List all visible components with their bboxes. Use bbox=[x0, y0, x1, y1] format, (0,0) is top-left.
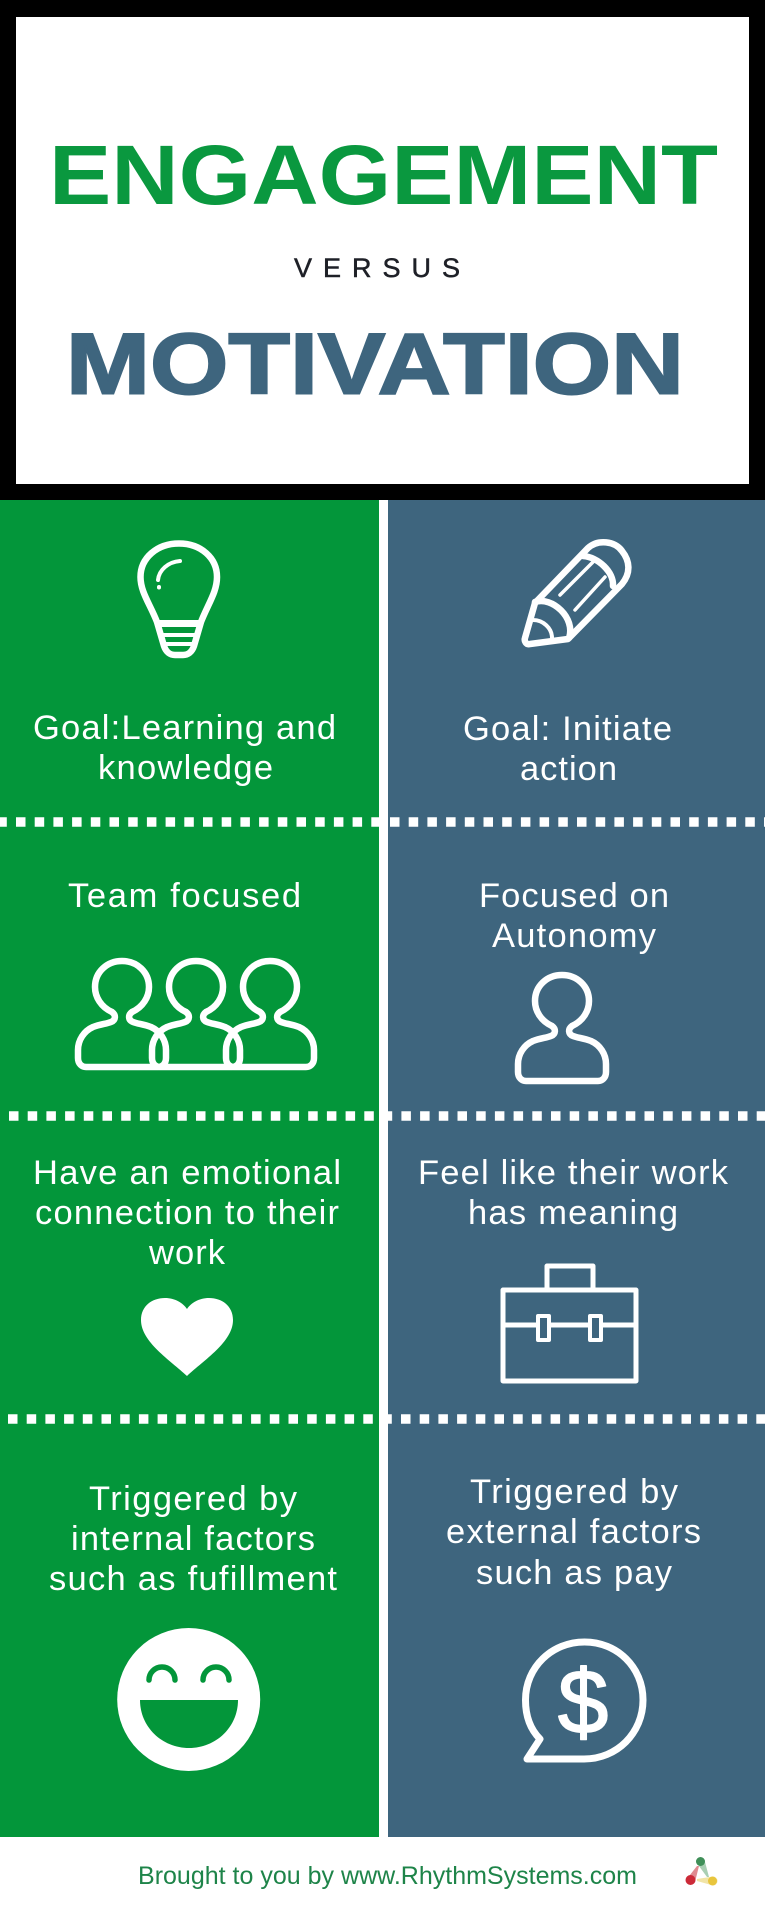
text: work has meaning: has meaning bbox=[468, 1194, 678, 1232]
text: goal initiate action: Goal: Initiate bbox=[463, 710, 672, 748]
title: motivation: MOTIVATION bbox=[66, 316, 684, 412]
subtitle: versus: VERSUS bbox=[294, 253, 460, 283]
title panel bbox=[0, 0, 765, 500]
icon: dollar speech bubble bbox=[526, 1642, 643, 1759]
text: goal learning and knowledge bbox=[33, 709, 336, 787]
text: focused on autonomy bbox=[479, 877, 669, 955]
text: triggered by external factors: such as pay bbox=[476, 1554, 673, 1592]
icon: laughing face bbox=[117, 1628, 260, 1771]
text: goal initiate action: action bbox=[520, 750, 617, 788]
text: triggered by internal factors bbox=[49, 1480, 337, 1598]
text: triggered by internal factors: such as fufillment bbox=[49, 1560, 337, 1598]
text: triggered by external factors bbox=[446, 1473, 701, 1592]
text: emotional connection: connection to their bbox=[35, 1194, 339, 1232]
icon: light bulb bbox=[140, 544, 217, 655]
text: emotional connection bbox=[33, 1154, 341, 1272]
text: triggered by external factors: Triggered by bbox=[470, 1473, 679, 1511]
icon: pencil bbox=[525, 542, 628, 644]
icon: briefcase bbox=[503, 1266, 636, 1381]
icon: heart bbox=[141, 1298, 233, 1376]
text: goal learning and knowledge: Goal:Learning and bbox=[33, 709, 336, 747]
white title area bbox=[16, 17, 749, 484]
text: focused on autonomy: Autonomy bbox=[492, 917, 657, 955]
row dividers bbox=[0, 822, 765, 1419]
panel: engagement column bbox=[0, 500, 379, 1837]
icon: three people bbox=[78, 961, 314, 1067]
text: focused on autonomy: Focused on bbox=[479, 877, 669, 915]
footer credit: Brought to you by www.RhythmSystems.com bbox=[138, 1862, 637, 1890]
text: goal initiate action bbox=[463, 710, 672, 788]
icon: dollar speech bubble: $ bbox=[558, 1652, 608, 1753]
title: engagement: ENGAGEMENT bbox=[49, 128, 718, 222]
text: work has meaning: Feel like their work bbox=[418, 1154, 729, 1192]
black frame bbox=[0, 0, 765, 500]
text: team focused: Team focused bbox=[68, 877, 301, 915]
text: emotional connection: work bbox=[148, 1234, 226, 1272]
text: work has meaning bbox=[418, 1154, 729, 1232]
text: triggered by internal factors: internal factors bbox=[71, 1520, 315, 1558]
icon: rhythm systems logo bbox=[686, 1857, 718, 1886]
text: triggered by external factors: external factors bbox=[446, 1513, 701, 1551]
icon: single person bbox=[518, 975, 606, 1081]
text: emotional connection: Have an emotional bbox=[33, 1154, 341, 1192]
text: goal learning and knowledge: knowledge bbox=[98, 749, 273, 787]
text: triggered by internal factors: Triggered by bbox=[89, 1480, 298, 1518]
panel: motivation column bbox=[388, 500, 765, 1837]
